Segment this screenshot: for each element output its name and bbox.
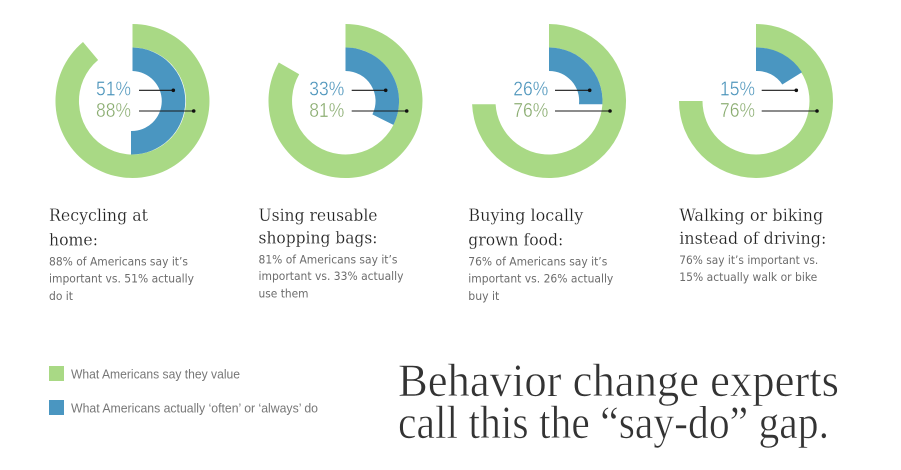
- heading: Walking or biking: [679, 206, 823, 226]
- panel: local food chart: [472, 24, 626, 178]
- panel: reusable bags chart: [268, 24, 422, 178]
- text block: recycling: [49, 206, 194, 303]
- legend: [49, 366, 318, 416]
- label 33%: 33%: [309, 78, 344, 100]
- text block: walking: [679, 206, 826, 284]
- description: 88% of Americans say it’s: [49, 255, 188, 269]
- green ring 81%: [268, 24, 422, 178]
- label 76%: 76%: [513, 100, 548, 122]
- text block: reusable bags: [258, 206, 404, 300]
- blue ring 51%: [131, 48, 185, 155]
- description: [468, 255, 613, 303]
- description: [258, 252, 404, 300]
- leader line 51%: [139, 88, 175, 92]
- description: 15% actually walk or bike: [679, 270, 817, 284]
- heading: [679, 206, 826, 249]
- heading: shopping bags:: [258, 228, 378, 248]
- heading: [468, 206, 584, 251]
- label 88%: 88%: [96, 100, 131, 122]
- description: do it: [49, 289, 73, 303]
- callout: say-do gap: call this the “say-do” gap.: [398, 397, 829, 449]
- panel: recycling chart: [55, 24, 209, 178]
- leader line 88%: [139, 109, 196, 113]
- panel: walking chart: [679, 24, 833, 178]
- description: important vs. 26% actually: [468, 272, 613, 286]
- label 15%: 15%: [720, 78, 755, 100]
- leader line 76%: [555, 109, 612, 113]
- description: buy it: [468, 289, 500, 303]
- description: 76% say it’s important vs.: [679, 253, 818, 267]
- label 76%: 76%: [720, 100, 755, 122]
- legend item: say they value: What Americans say they value: [71, 366, 240, 382]
- blue ring 33%: [346, 47, 399, 125]
- heading: home:: [49, 231, 98, 251]
- leader line 76%: [762, 109, 819, 113]
- blue ring 26%: [549, 47, 603, 104]
- text block: local food: [468, 206, 613, 303]
- green ring 76%: [679, 24, 833, 178]
- description: important vs. 51% actually: [49, 272, 194, 286]
- description: [49, 255, 194, 303]
- description: 81% of Americans say it’s: [258, 252, 398, 266]
- leader line 15%: [762, 88, 798, 92]
- green ring 88%: [55, 24, 209, 178]
- leader line 33%: [352, 88, 388, 92]
- callout: say-do gap: [398, 355, 839, 449]
- heading: Recycling at: [49, 206, 148, 226]
- heading: [49, 206, 148, 251]
- leader line 81%: [352, 109, 409, 113]
- label 26%: 26%: [513, 78, 548, 100]
- green ring 76%: [472, 24, 626, 178]
- heading: [258, 206, 378, 248]
- label 81%: 81%: [309, 100, 344, 122]
- heading: Using reusable: [258, 206, 378, 226]
- description: 76% of Americans say it’s: [468, 255, 607, 269]
- legend item: actually do: What Americans actually ‘often’ or ‘always’ do: [71, 400, 318, 416]
- heading: Buying locally: [468, 206, 584, 226]
- label 51%: 51%: [96, 78, 131, 100]
- callout: say-do gap: Behavior change experts: [398, 355, 839, 407]
- description: important vs. 33% actually: [258, 269, 404, 283]
- description: use them: [258, 286, 308, 300]
- description: [679, 253, 818, 284]
- leader line 26%: [555, 88, 592, 92]
- heading: grown food:: [468, 231, 563, 251]
- blue ring 15%: [756, 47, 802, 84]
- heading: instead of driving:: [679, 229, 826, 249]
